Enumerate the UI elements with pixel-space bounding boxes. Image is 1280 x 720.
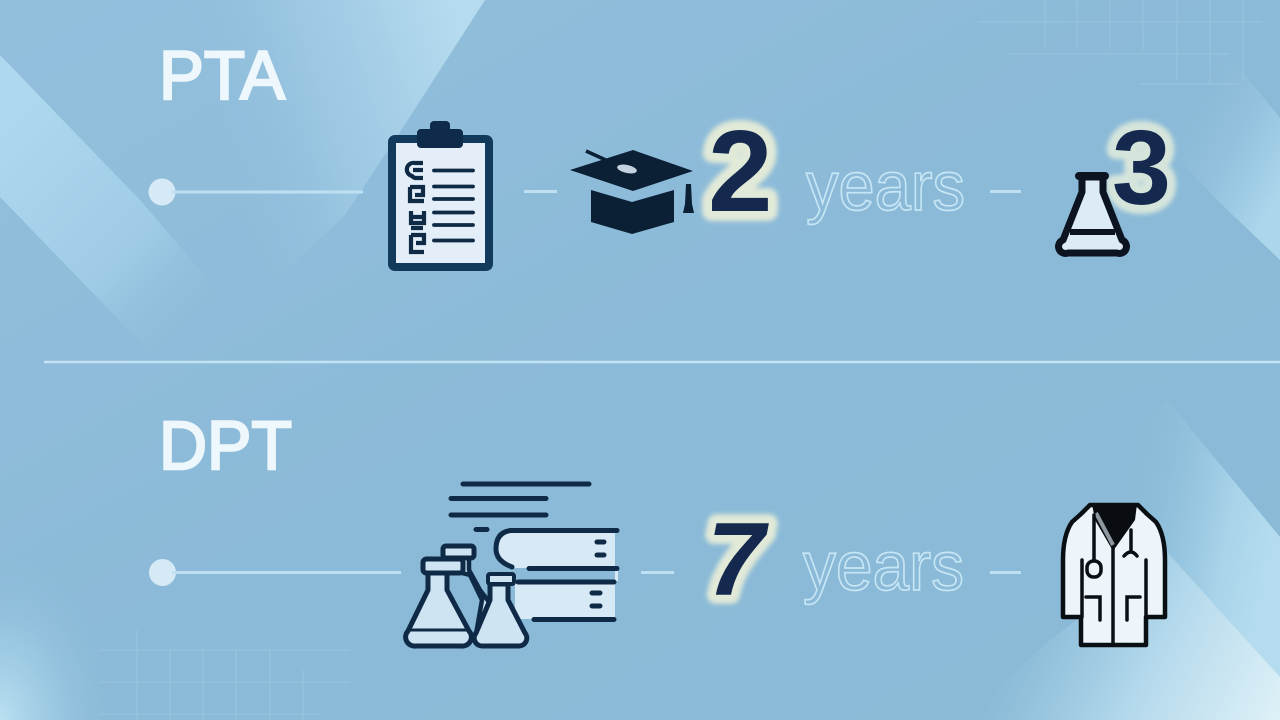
timeline start dot and line bbox=[149, 559, 401, 586]
icon: graduation cap bbox=[570, 150, 694, 234]
connector bbox=[641, 571, 674, 574]
number: 3: 3 bbox=[1112, 109, 1171, 227]
heading: DPT: DPT bbox=[159, 407, 292, 484]
connector bbox=[524, 190, 557, 193]
icon: flask bbox=[1059, 176, 1126, 253]
label: years: years bbox=[803, 527, 964, 605]
number: 2: 2 bbox=[708, 106, 773, 236]
divider bbox=[44, 361, 1280, 363]
panel: DPT pathway bbox=[149, 407, 1165, 646]
number: 3: 3 bbox=[1112, 109, 1171, 227]
heading: PTA: PTA bbox=[159, 37, 285, 114]
panel: PTA pathway bbox=[148, 37, 1171, 267]
number: 2: 2 bbox=[708, 106, 773, 236]
label: years: years bbox=[806, 147, 965, 225]
connector bbox=[990, 571, 1021, 574]
number: 7: 7 bbox=[707, 502, 769, 618]
icon: clipboard checklist bbox=[392, 121, 489, 267]
connector bbox=[990, 190, 1021, 193]
number: 7: 7 bbox=[707, 502, 769, 618]
icon: doctor coat with stethoscope bbox=[1063, 504, 1165, 645]
icon: books and flasks bbox=[406, 484, 618, 646]
timeline start dot and line bbox=[148, 178, 363, 206]
